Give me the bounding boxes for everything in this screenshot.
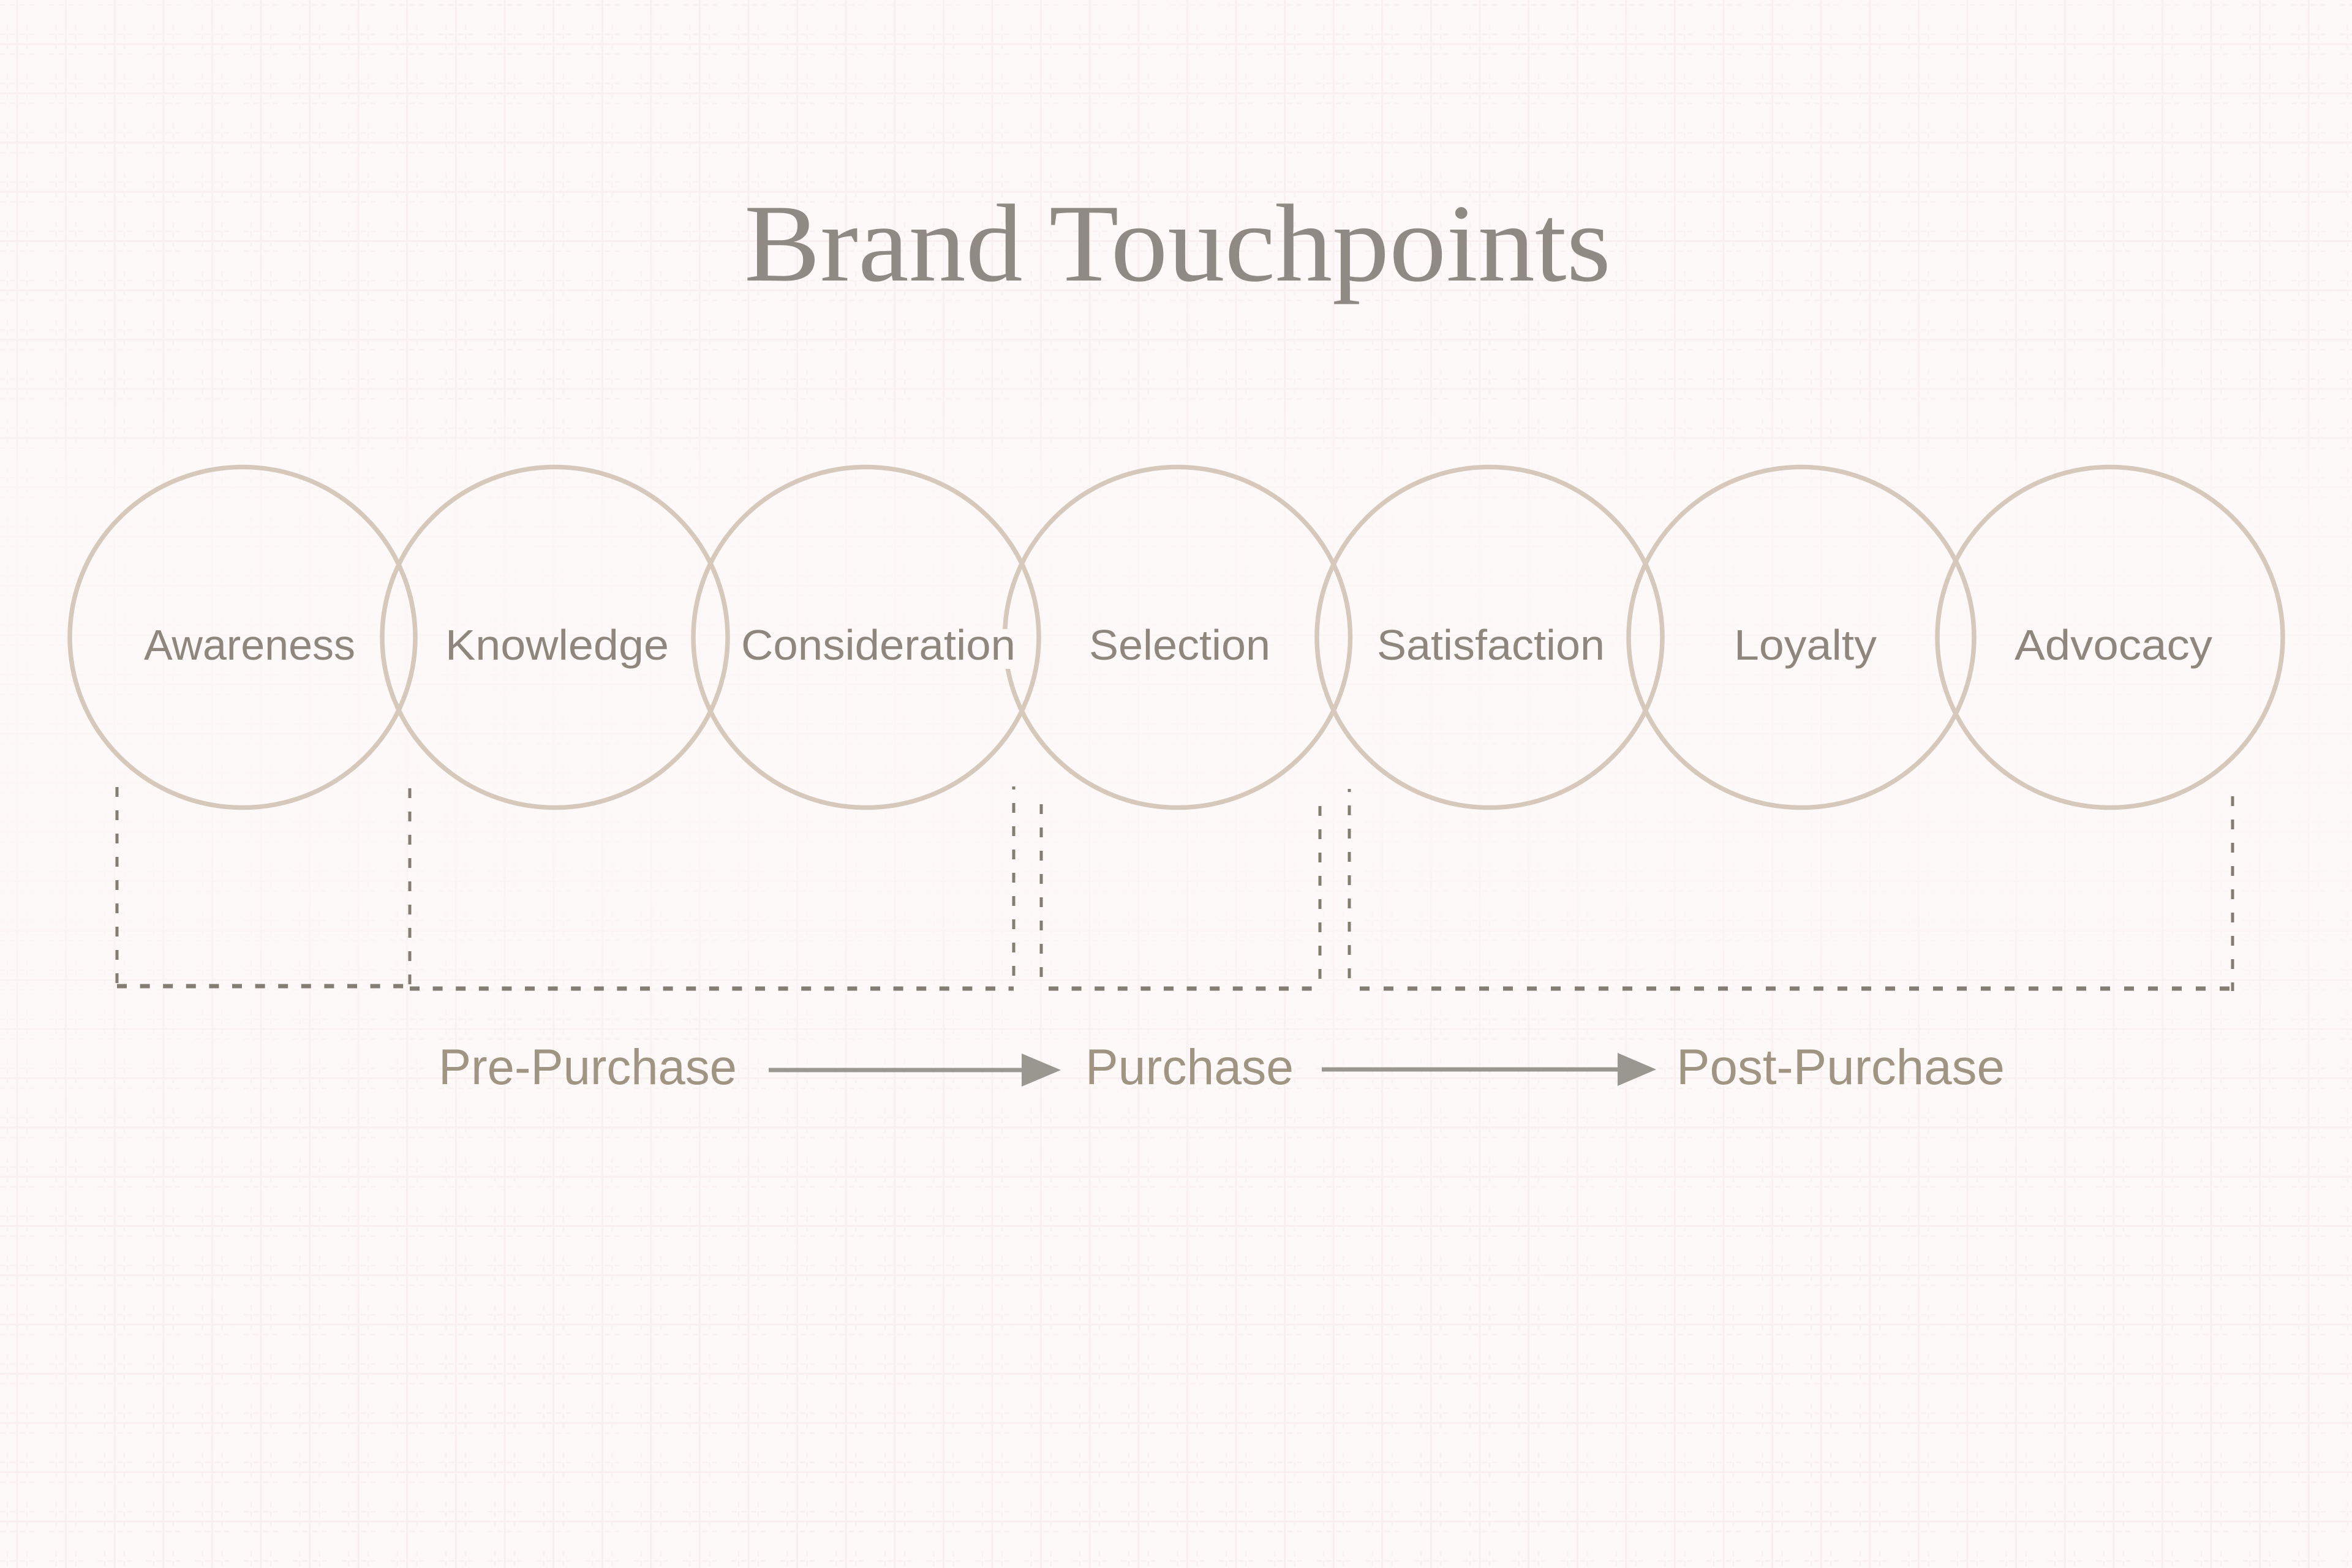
title: Brand Touchpoints	[744, 183, 1611, 305]
arrow: purchase to post-purchase	[1322, 1053, 1656, 1086]
label knockout behind consideration	[996, 629, 1013, 669]
circle: loyalty	[1629, 467, 1974, 807]
stage labels	[439, 1039, 2005, 1095]
bracket: knowledge and consideration	[410, 786, 1014, 989]
label: selection: Selection	[1089, 621, 1270, 669]
bracket: selection	[1041, 804, 1320, 989]
circle: knowledge	[382, 467, 728, 807]
label: pre-purchase: Pre-Purchase	[439, 1039, 737, 1095]
label: knowledge: Knowledge	[445, 621, 669, 669]
label: consideration: Consideration	[741, 621, 1016, 669]
touchpoint labels	[144, 621, 2212, 669]
circle: satisfaction	[1317, 467, 1662, 807]
touchpoint circles	[70, 467, 2283, 807]
dashed brackets	[117, 786, 2233, 991]
label: post-purchase: Post-Purchase	[1676, 1039, 2005, 1095]
arrow: pre-purchase to purchase	[769, 1054, 1061, 1087]
label: loyalty: Loyalty	[1734, 621, 1877, 669]
label: awareness: Awareness	[144, 621, 355, 669]
label: satisfaction: Satisfaction	[1377, 621, 1605, 669]
bracket: awareness	[117, 787, 410, 987]
circle: consideration	[693, 467, 1039, 807]
circle: selection	[1005, 467, 1350, 807]
label: advocacy: Advocacy	[2015, 621, 2212, 669]
circle: advocacy	[1937, 467, 2283, 807]
circle: awareness	[70, 467, 415, 807]
bracket: satisfaction, loyalty and advocacy	[1349, 789, 2233, 991]
label: purchase: Purchase	[1085, 1039, 1294, 1095]
